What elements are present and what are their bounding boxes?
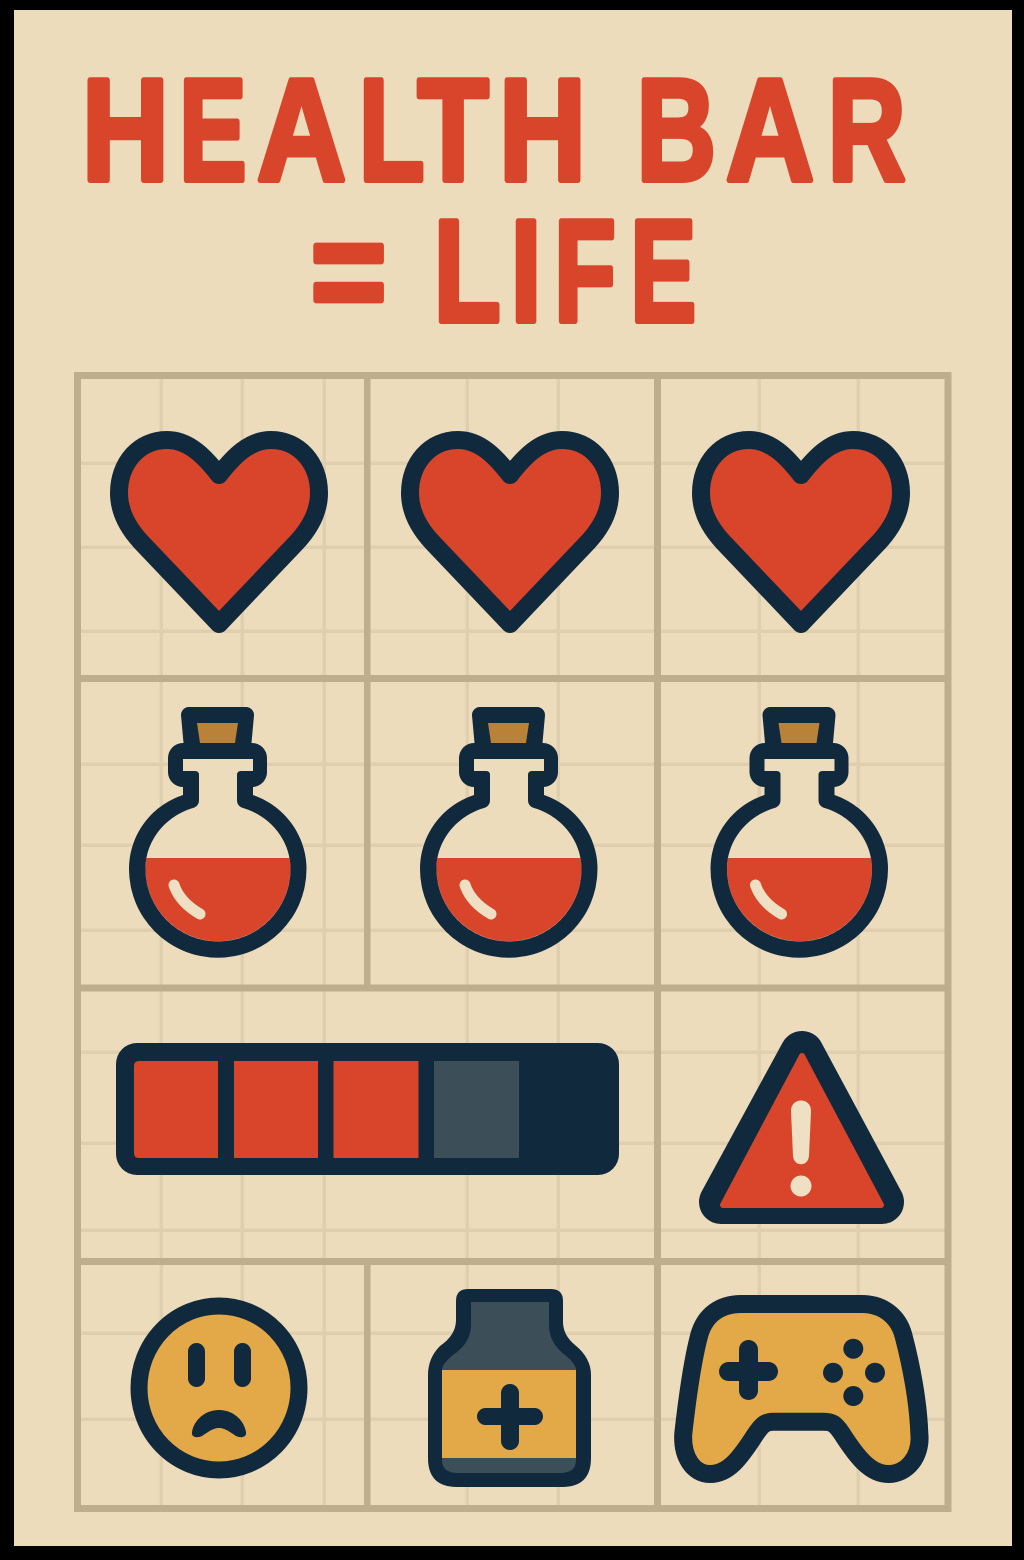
- title: L: [434, 190, 501, 352]
- title: B: [637, 49, 716, 211]
- title: H: [499, 49, 586, 211]
- icon: warning triangle: [721, 1053, 882, 1205]
- title: T: [418, 49, 489, 211]
- title: F: [554, 190, 616, 352]
- title: [82, 49, 905, 352]
- icon: potion 3: [710, 715, 888, 958]
- health segment 2: [234, 1061, 318, 1158]
- icon: heart 2: [410, 440, 610, 624]
- title: A: [257, 49, 346, 211]
- icon: potion 1: [129, 715, 306, 958]
- empty health segment: [434, 1061, 519, 1158]
- graph paper grid: [77, 376, 948, 1509]
- icon: heart 3: [701, 440, 901, 624]
- icon: medicine bottle: [428, 1289, 591, 1487]
- health segment 3: [334, 1061, 418, 1158]
- health bar: [116, 1043, 619, 1175]
- title: R: [828, 49, 906, 211]
- title: E: [630, 190, 696, 352]
- health segment 1: [134, 1061, 218, 1158]
- title: E: [179, 49, 246, 211]
- title: H: [82, 49, 169, 211]
- icon: heart 1: [119, 440, 319, 624]
- icon: potion 2: [420, 715, 598, 958]
- title: A: [726, 49, 814, 211]
- title: I: [511, 190, 542, 352]
- icon: game controller: [683, 1304, 920, 1474]
- icon: sad face: [139, 1306, 299, 1470]
- title: =: [311, 190, 387, 352]
- title: L: [359, 49, 424, 211]
